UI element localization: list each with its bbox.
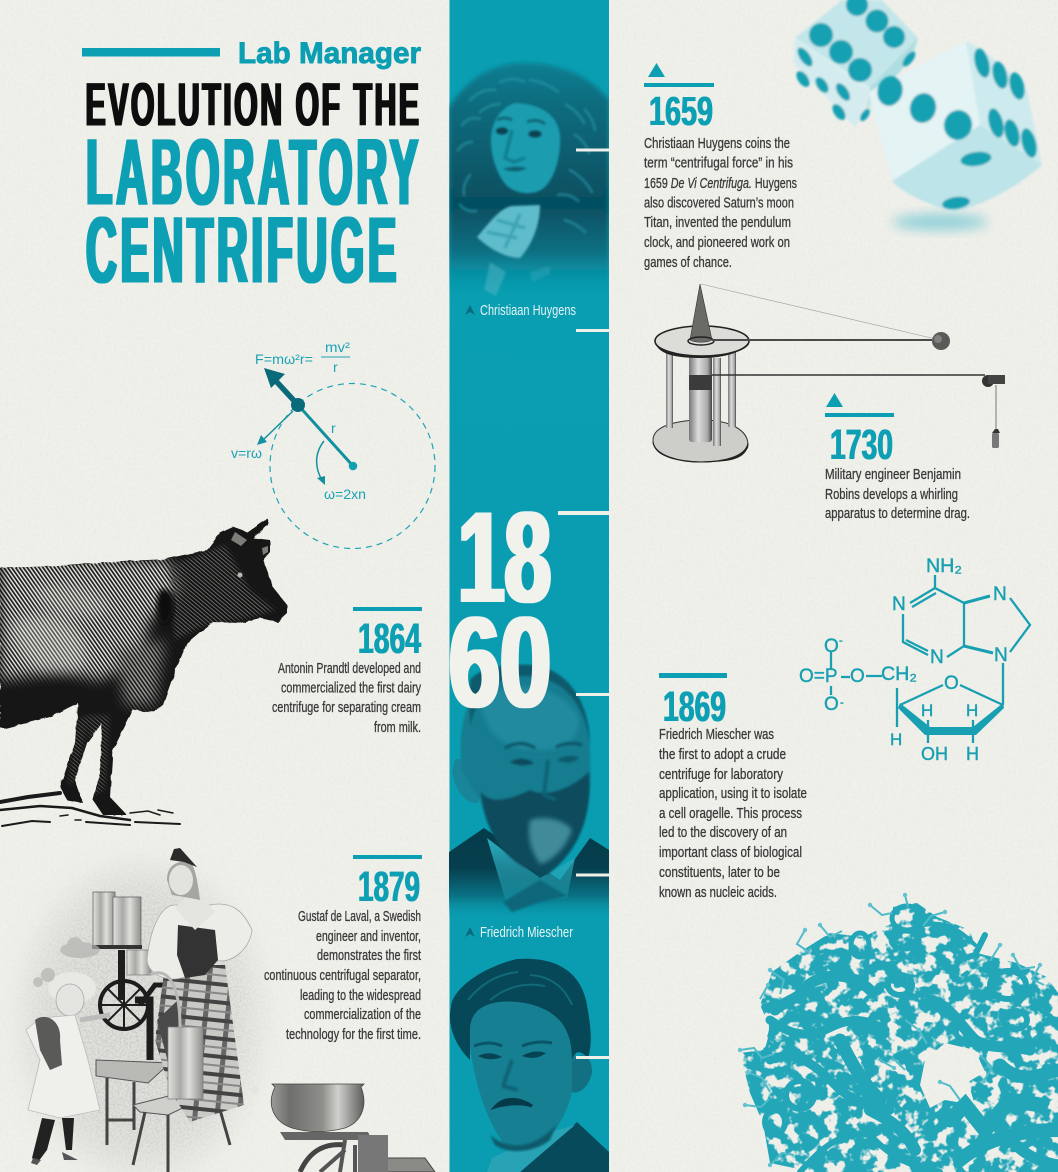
event: 1869: the first to adopt a crude: [659, 746, 786, 763]
diagram: centrifugal force: F=mω²r=: [255, 351, 313, 367]
diagram: nucleotide structure: O: [944, 673, 959, 694]
diagram: nucleotide structure: H: [921, 701, 933, 720]
ear: [452, 759, 480, 803]
header bar: [82, 48, 220, 56]
label: Christiaan Huygens: [465, 304, 576, 318]
event: 1869: important class of biological: [659, 844, 802, 861]
event: 1869: constituents, later to be: [659, 864, 780, 881]
pulley: [982, 375, 994, 387]
event: 1869: centrifuge for laboratory: [659, 766, 783, 783]
event: 1879: commercialization of the: [304, 1006, 421, 1023]
beard: [481, 772, 589, 874]
illustration: Robins whirling arm apparatus: [653, 284, 1005, 462]
event: 1869: Friedrich Miescher was: [659, 726, 774, 743]
face: [491, 103, 560, 193]
event: 1659: term “centrifugal force” in his: [644, 154, 793, 172]
event: 1869: known as nucleic acids.: [659, 884, 777, 901]
diagram: nucleotide structure: N: [994, 645, 1008, 666]
tall can: [168, 1027, 203, 1099]
infographic canvas: CENTRIFUGE: [86, 198, 400, 304]
diagram: centrifugal force: v=rω: [231, 445, 262, 461]
diagram: centrifugal force: mv²: [325, 339, 350, 355]
illustration: protein ribbon structure: [738, 893, 1058, 1172]
event: 1879: Gustaf de Laval, a Swedish: [298, 908, 421, 925]
event: 1659: clock, and pioneered work on: [644, 234, 790, 251]
lace collar: [477, 205, 540, 258]
big date: 1860: 18: [458, 484, 551, 630]
big date: 1860: 60: [449, 589, 551, 735]
diagram: nucleotide structure: N: [892, 594, 906, 615]
diagram: nucleotide structure: -: [839, 635, 843, 647]
diagram: nucleotide structure: N: [993, 584, 1007, 605]
large die: [868, 41, 1042, 212]
diagram: nucleotide structure: N: [930, 647, 944, 668]
event: 1869: 1869: [663, 683, 726, 731]
event: 1659: 1659 De Vi Centrifuga. Huygens: [644, 175, 797, 192]
logo: Lab Manager: Lab Manager: [238, 37, 421, 70]
event: 1659: [644, 63, 797, 271]
die shadow: [892, 214, 988, 230]
big date: 1860: [449, 484, 551, 735]
portrait: Friedrich Miescher: [449, 665, 609, 925]
diagram: nucleotide structure: -: [840, 697, 844, 709]
table and stool: [96, 1060, 230, 1172]
diagram: nucleotide structure: [799, 556, 1030, 764]
event: 1659: games of chance.: [644, 254, 732, 271]
event: 1879: demonstrates the first: [317, 947, 422, 964]
illustration: dairy maid, child and separator: [10, 848, 280, 1172]
diagram: nucleotide structure: H: [966, 701, 978, 720]
diagram: nucleotide structure: O: [824, 694, 839, 715]
label: Friedrich Miescher: [465, 926, 573, 937]
diagram: centrifugal force: r: [331, 420, 336, 436]
diagram: nucleotide structure: OH: [921, 744, 948, 764]
event: 1879: engineer and inventor,: [316, 928, 421, 945]
diagram: nucleotide structure: NH₂: [926, 556, 962, 577]
portrait: Christiaan Huygens: [449, 63, 609, 300]
diagram: nucleotide structure: O=P: [799, 666, 838, 687]
arm and ball: [712, 339, 932, 341]
event: 1879: technology for the first time.: [286, 1026, 421, 1043]
diagram: nucleotide structure: H: [890, 730, 902, 749]
woman: [147, 848, 252, 1122]
child: [26, 972, 110, 1165]
event: 1869: a cell oragelle. This process: [659, 805, 802, 822]
label: Christiaan Huygens: Christiaan Huygens: [480, 302, 576, 319]
event: 1659: Christiaan Huygens coins the: [644, 135, 790, 152]
event: 1864: centrifuge for separating cream: [272, 699, 421, 716]
ribose wedge: [898, 703, 1004, 735]
suit: [449, 828, 609, 925]
columns: [666, 352, 673, 428]
ball-and-stick side chains: [740, 895, 1044, 1165]
diagram: nucleotide structure: O: [824, 636, 839, 657]
infographic canvas: EVOLUTION OF THE: [86, 70, 422, 138]
head: [460, 664, 591, 810]
diagram: centrifugal force: r: [333, 359, 338, 375]
flowers and foliage: [33, 937, 259, 1094]
ribbons: [762, 906, 1058, 1172]
event: 1869: application, using it to isolate: [659, 785, 807, 802]
event: 1659: Titan, invented the pendulum: [644, 214, 791, 231]
machine wheel: [100, 981, 170, 1060]
event: 1879: 1879: [358, 863, 420, 911]
infographic canvas: LABORATORY: [86, 120, 422, 226]
top disc: [655, 326, 749, 356]
diagram: centrifugal force: [231, 339, 435, 548]
event: 1879: [264, 855, 422, 1043]
portrait: third figure: [450, 959, 609, 1172]
event: 1869: led to the discovery of an: [659, 824, 787, 841]
illustration: separator bowl: [271, 1084, 435, 1172]
event: 1730: Robins develops a whirling: [825, 486, 958, 503]
small die: [793, 0, 918, 127]
diagram: nucleotide structure: O: [850, 666, 865, 687]
milk cans: [92, 892, 151, 1000]
event: 1869: [659, 673, 807, 901]
lower cord: [712, 374, 985, 376]
event: 1730: apparatus to determine drag.: [825, 505, 970, 522]
event: 1730: 1730: [830, 421, 893, 469]
event: 1659: 1659: [649, 88, 713, 134]
diagram: nucleotide structure: CH₂: [881, 664, 917, 685]
cone: [690, 284, 712, 342]
title block: [82, 37, 422, 304]
event: 1864: from milk.: [374, 719, 421, 736]
base: [653, 420, 748, 462]
illustration: cow: [0, 510, 300, 830]
event: 1864: [272, 607, 422, 736]
diagram: centrifugal force: ω=2xn: [324, 486, 366, 502]
central timeline strip: [449, 0, 609, 1172]
event: 1879: leading to the widespread: [300, 987, 421, 1004]
label: Friedrich Miescher: Friedrich Miescher: [480, 924, 573, 941]
illustration: dice: [793, 0, 1042, 230]
event: 1730: [825, 393, 970, 522]
event: 1864: commercialized the first dairy: [281, 680, 421, 696]
weight: [992, 433, 999, 448]
timeline ticks: [558, 148, 609, 1059]
ground: [0, 793, 180, 826]
event: 1730: Military engineer Benjamin: [825, 466, 961, 483]
event: 1659: also discovered Saturn’s moon: [644, 194, 794, 212]
event: 1879: continuous centrifugal separator,: [264, 967, 421, 984]
event: 1864: 1864: [358, 615, 421, 663]
diagram: nucleotide structure: H: [966, 744, 979, 764]
event: 1864: Antonin Prandtl developed and: [278, 660, 421, 677]
